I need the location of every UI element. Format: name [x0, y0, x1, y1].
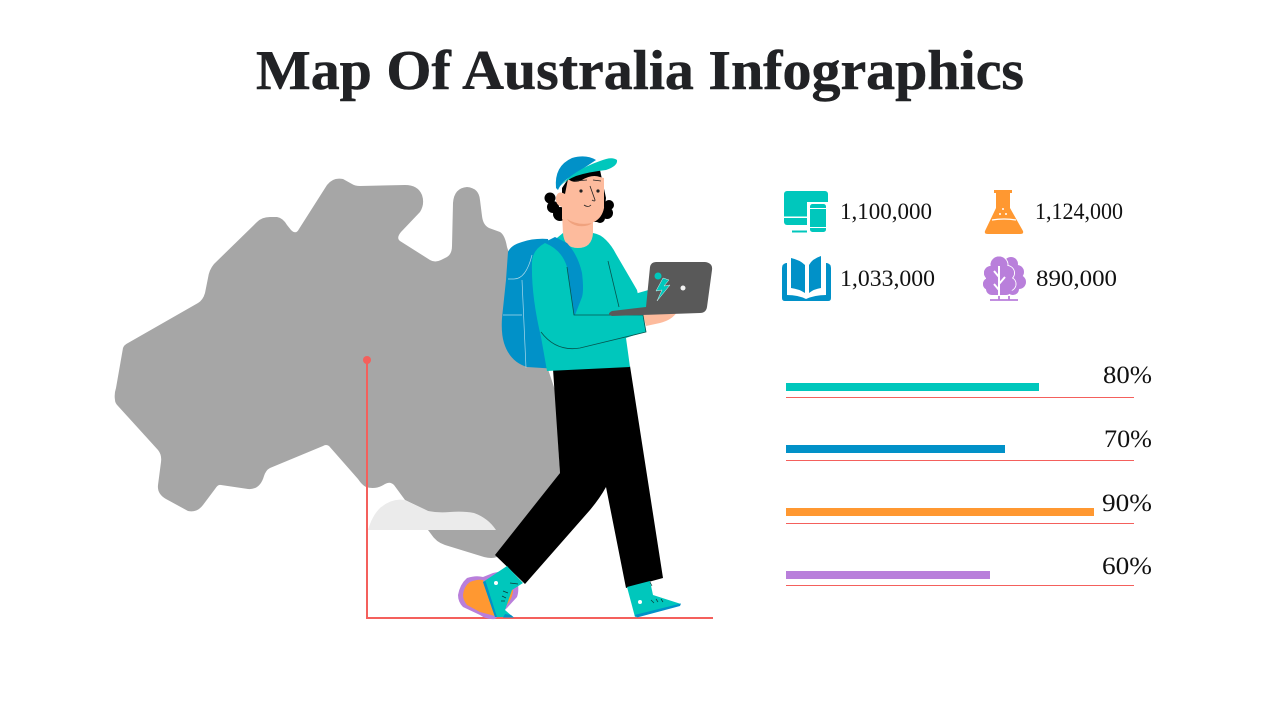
icon: tree [982, 256, 1026, 300]
facial details [575, 180, 601, 206]
title: Map Of Australia Infographics [256, 40, 1024, 102]
far arm [632, 289, 652, 312]
bar: 80%: 80% [1103, 362, 1152, 389]
cap [556, 156, 617, 190]
bar: 60% [786, 553, 1152, 586]
stat: forest: 890,000 [1036, 266, 1117, 291]
sweater arm [532, 243, 646, 349]
hair [544, 170, 614, 223]
bar: 70%: 70% [1104, 426, 1152, 453]
traveller figure [458, 156, 712, 619]
bar: 70% [786, 426, 1152, 460]
stat: science [985, 190, 1123, 234]
bar: 60%: 60% [1102, 553, 1152, 580]
bar: 90% [786, 490, 1152, 524]
cloud on map [368, 500, 496, 530]
stat: devices [784, 191, 932, 234]
hand [643, 312, 677, 326]
right shoe [627, 581, 681, 618]
bar: 90%: 90% [1102, 490, 1152, 517]
backpack [502, 239, 560, 369]
trousers [495, 366, 663, 588]
stat: books [782, 256, 935, 301]
left shoe with blob [458, 566, 523, 619]
stat: books: 1,033,000 [840, 266, 935, 291]
icon: open book [782, 256, 831, 301]
face [556, 176, 604, 223]
icon: monitor and phone [784, 191, 829, 234]
icon: flask [985, 190, 1023, 234]
map of Australia [115, 179, 560, 558]
sweater [532, 233, 646, 371]
stat: forest [982, 256, 1117, 300]
laptop [609, 262, 712, 316]
stat: devices: 1,100,000 [840, 199, 932, 224]
bar: 80% [786, 362, 1152, 398]
stat: science: 1,124,000 [1035, 199, 1123, 224]
backpack strap [545, 237, 583, 315]
red axis with pin [363, 356, 713, 618]
neck [562, 212, 593, 248]
